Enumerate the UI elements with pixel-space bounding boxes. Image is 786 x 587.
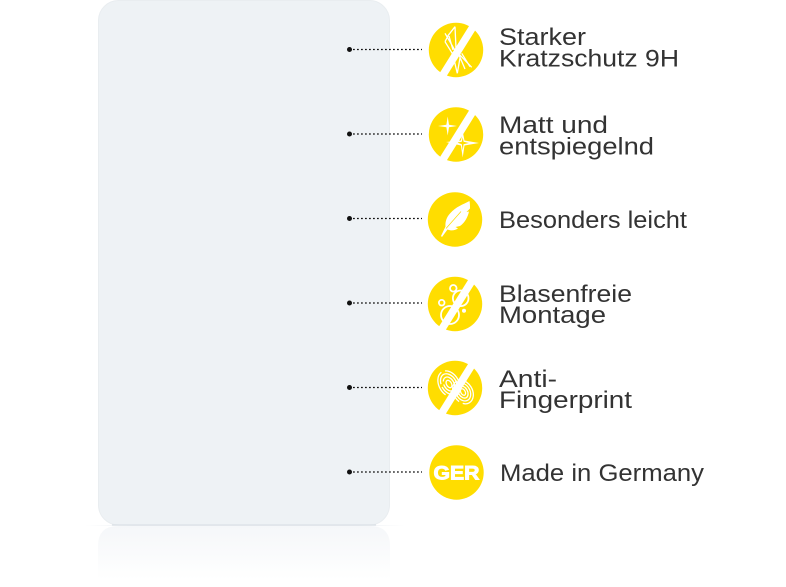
row: Matt und entspiegelnd bbox=[347, 106, 654, 162]
row: Made in Germany bbox=[347, 445, 705, 500]
icon: bubbles crossed out bbox=[428, 276, 482, 332]
label: Matt und entspiegelnd bbox=[499, 112, 654, 160]
label: Made in Germany: Made in Germany bbox=[500, 460, 705, 487]
row: Blasenfreie Montage bbox=[347, 276, 632, 332]
leader line 5 bbox=[347, 385, 422, 390]
label: Matt und entspiegelnd: entspiegelnd bbox=[499, 134, 654, 160]
label: Besonders leicht: Besonders leicht bbox=[499, 207, 687, 234]
icon: GER badge: GER bbox=[434, 463, 480, 484]
leader line 1 bbox=[347, 47, 422, 52]
leader line 4 bbox=[347, 300, 422, 306]
label: Anti-Fingerprint bbox=[499, 366, 632, 414]
label: Blasenfreie Montage: Montage bbox=[499, 302, 606, 329]
label: Starker Kratzschutz 9H bbox=[499, 24, 679, 72]
icon: scratches crossed out bbox=[429, 22, 483, 78]
reflection of screen protector bbox=[85, 525, 405, 580]
leader line 6 bbox=[347, 470, 422, 474]
icon: GER badge bbox=[429, 445, 484, 500]
label: Blasenfreie Montage: Blasenfreie bbox=[499, 281, 632, 308]
label: Matt und entspiegelnd: Matt und bbox=[499, 112, 608, 139]
leader line 2 bbox=[347, 132, 422, 136]
label: Blasenfreie Montage bbox=[499, 281, 632, 329]
row: Anti-Fingerprint bbox=[347, 360, 632, 416]
icon: feather bbox=[428, 192, 482, 247]
label: Anti-Fingerprint: Fingerprint bbox=[499, 387, 632, 414]
leader line 3 bbox=[347, 216, 422, 221]
row: Starker Kratzschutz 9H bbox=[347, 22, 679, 78]
row: Besonders leicht bbox=[347, 192, 687, 247]
label: Starker Kratzschutz 9H: Kratzschutz 9H bbox=[499, 46, 679, 72]
icon: fingerprint crossed out bbox=[428, 360, 482, 416]
label: Starker Kratzschutz 9H: Starker bbox=[499, 24, 586, 51]
label: Anti-Fingerprint: Anti- bbox=[499, 366, 557, 393]
panel: screen protector bbox=[98, 0, 390, 525]
icon: glare sparkles crossed out bbox=[429, 106, 483, 162]
